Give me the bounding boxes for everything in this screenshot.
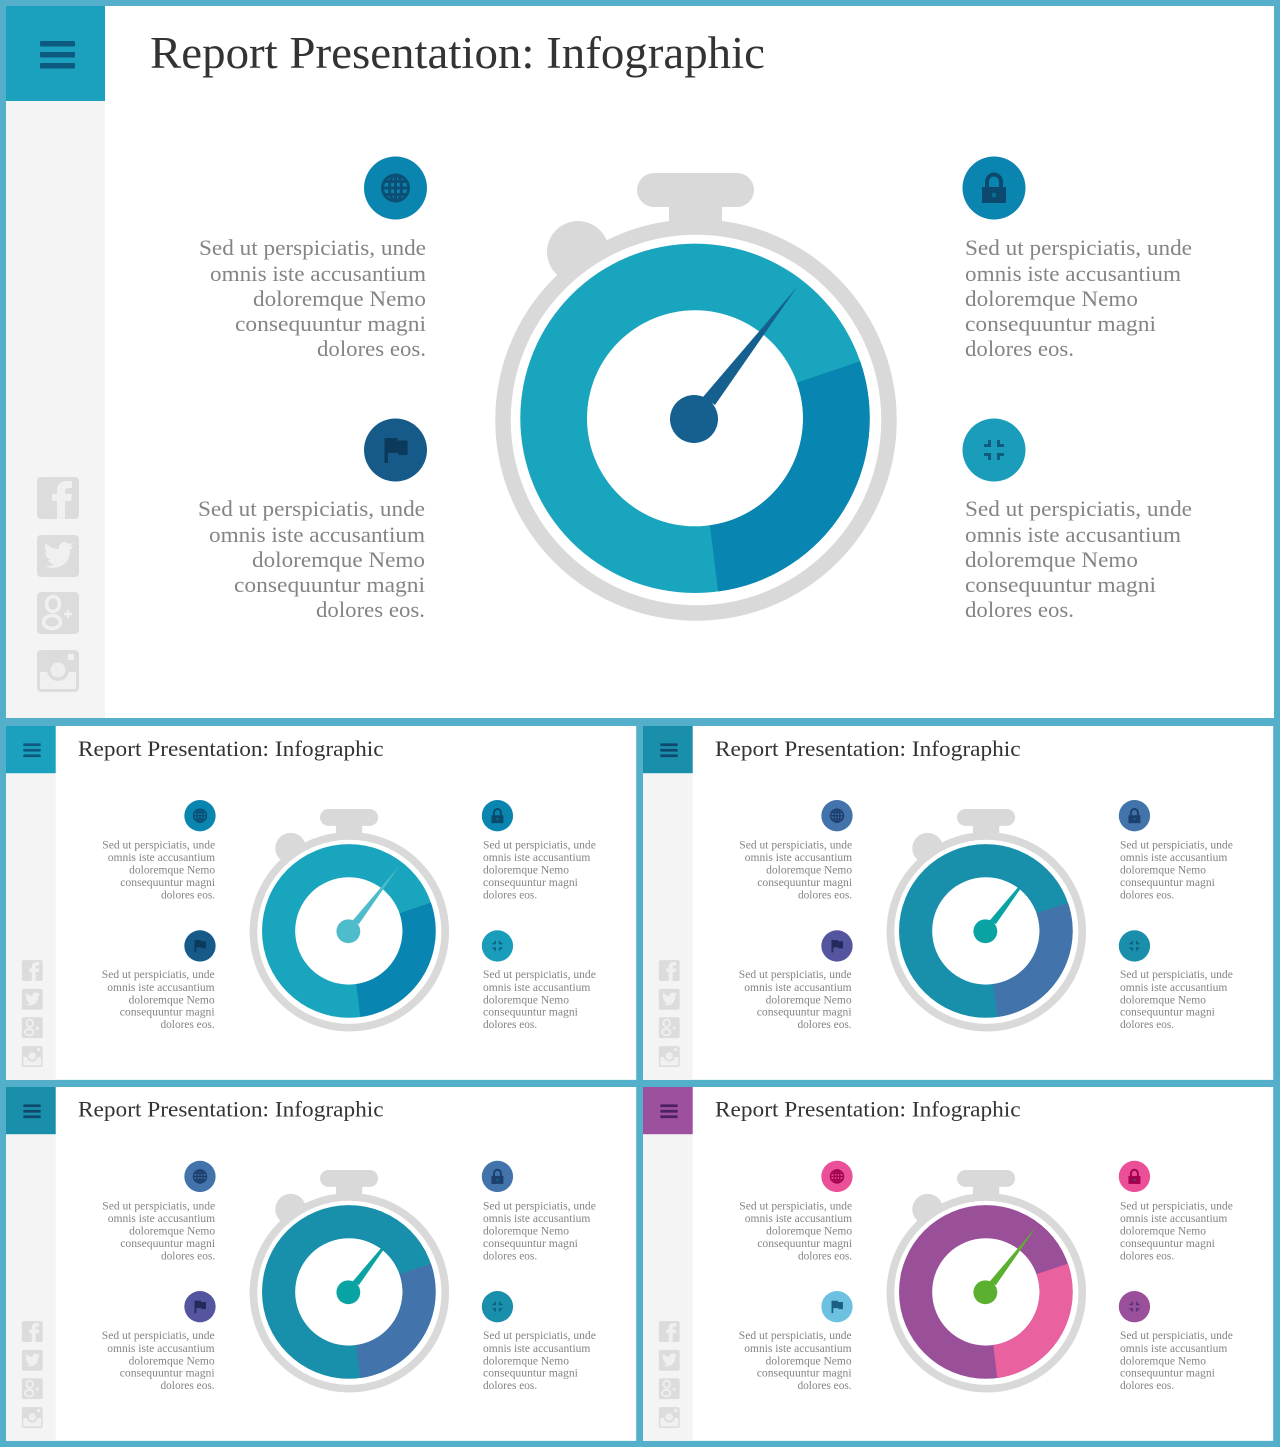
- text block: top left: consequuntur magni: [120, 877, 215, 889]
- text block: bottom left: omnis iste accusantium: [107, 1343, 215, 1355]
- text block: top right: [483, 1200, 596, 1262]
- icon: globe: [184, 1161, 216, 1192]
- text block: top right: [1120, 839, 1233, 901]
- text block: bottom left: omnis iste accusantium: [744, 1343, 852, 1355]
- text block: bottom right: dolores eos.: [483, 1380, 537, 1392]
- social icons column: [659, 1321, 680, 1428]
- title: Report Presentation: Infographic: [78, 736, 384, 761]
- text block: bottom right: omnis iste accusantium: [1120, 1343, 1228, 1355]
- title: Report Presentation: Infographic: [715, 736, 1021, 761]
- text block: bottom right: [965, 496, 1192, 622]
- panel: small slide, blue: [6, 726, 636, 1080]
- text block: bottom right: doloremque Nemo: [1120, 1355, 1206, 1367]
- text block: bottom right: [483, 1330, 596, 1392]
- text block: top right: dolores eos.: [1120, 889, 1174, 901]
- text block: bottom left: consequuntur magni: [234, 572, 425, 597]
- text block: top right: Sed ut perspiciatis, unde: [1120, 839, 1233, 851]
- text block: top right: doloremque Nemo: [1120, 1226, 1206, 1238]
- icon: globe: [184, 800, 216, 831]
- text block: bottom left: doloremque Nemo: [766, 994, 852, 1006]
- text block: top right: Sed ut perspiciatis, unde: [965, 235, 1192, 260]
- text block: bottom right: dolores eos.: [1120, 1019, 1174, 1031]
- text block: bottom left: omnis iste accusantium: [744, 982, 852, 994]
- text block: top left: [102, 839, 216, 901]
- text block: top right: Sed ut perspiciatis, unde: [483, 839, 596, 851]
- text block: bottom right: Sed ut perspiciatis, unde: [965, 496, 1192, 521]
- icon: flag: [184, 930, 216, 962]
- panel: main slide: [6, 6, 1274, 718]
- text block: bottom left: consequuntur magni: [120, 1007, 215, 1019]
- text block: top left: omnis iste accusantium: [108, 852, 215, 864]
- text block: bottom left: dolores eos.: [316, 597, 425, 622]
- text block: top right: Sed ut perspiciatis, unde: [1120, 1200, 1233, 1212]
- text block: bottom left: Sed ut perspiciatis, unde: [739, 1330, 852, 1342]
- text block: top left: Sed ut perspiciatis, unde: [102, 839, 215, 851]
- icon: compress arrows: [482, 1291, 513, 1322]
- text block: bottom left: Sed ut perspiciatis, unde: [102, 1330, 215, 1342]
- text block: top left: consequuntur magni: [120, 1238, 215, 1250]
- text block: top left: omnis iste accusantium: [108, 1213, 215, 1225]
- text block: top left: consequuntur magni: [757, 877, 852, 889]
- text block: top left: [739, 839, 853, 901]
- text block: top left: dolores eos.: [161, 889, 215, 901]
- icon: compress arrows: [962, 418, 1026, 482]
- text block: top right: [483, 839, 596, 901]
- text block: top right: omnis iste accusantium: [1120, 852, 1228, 864]
- text block: bottom left: doloremque Nemo: [129, 1355, 215, 1367]
- text block: bottom right: omnis iste accusantium: [965, 522, 1182, 547]
- text block: bottom left: Sed ut perspiciatis, unde: [198, 496, 425, 521]
- text block: top left: Sed ut perspiciatis, unde: [739, 839, 852, 851]
- text block: bottom left: [739, 969, 852, 1031]
- text block: bottom right: Sed ut perspiciatis, unde: [1120, 1330, 1233, 1342]
- icon: flag: [364, 418, 427, 482]
- text block: top right: consequuntur magni: [483, 1238, 578, 1250]
- text block: top left: [102, 1200, 216, 1262]
- title: Report Presentation: Infographic: [78, 1096, 384, 1121]
- menu header block: [643, 1087, 693, 1134]
- text block: top left: [739, 1200, 853, 1262]
- text block: bottom left: [198, 496, 426, 622]
- text block: top right: [1120, 1200, 1233, 1262]
- social icons column: [22, 1321, 43, 1428]
- text block: bottom left: dolores eos.: [797, 1019, 852, 1031]
- title: Report Presentation: Infographic: [150, 28, 765, 78]
- text block: top left: dolores eos.: [317, 336, 426, 361]
- social icons column: [37, 477, 79, 692]
- text block: bottom left: omnis iste accusantium: [209, 522, 426, 547]
- chart: stopwatch donut: [253, 809, 445, 1028]
- text block: top left: omnis iste accusantium: [745, 852, 852, 864]
- text block: top left: consequuntur magni: [757, 1238, 852, 1250]
- text block: top right: [965, 235, 1192, 361]
- text block: bottom right: doloremque Nemo: [1120, 994, 1206, 1006]
- text block: top right: consequuntur magni: [965, 311, 1156, 336]
- text block: bottom right: consequuntur magni: [483, 1007, 578, 1019]
- text block: bottom right: Sed ut perspiciatis, unde: [483, 969, 596, 981]
- icon: lock: [1119, 1161, 1150, 1192]
- text block: bottom right: dolores eos.: [1120, 1380, 1174, 1392]
- panel: small slide, purple and pink: [643, 1087, 1273, 1441]
- text block: bottom right: omnis iste accusantium: [483, 982, 591, 994]
- text block: top right: consequuntur magni: [1120, 1238, 1215, 1250]
- text block: top right: consequuntur magni: [483, 877, 578, 889]
- text block: bottom right: omnis iste accusantium: [483, 1343, 591, 1355]
- text block: top right: omnis iste accusantium: [965, 261, 1182, 286]
- text block: bottom right: consequuntur magni: [965, 572, 1156, 597]
- text block: top left: [199, 235, 427, 361]
- text block: bottom right: consequuntur magni: [483, 1368, 578, 1380]
- text block: bottom right: Sed ut perspiciatis, unde: [483, 1330, 596, 1342]
- text block: top left: Sed ut perspiciatis, unde: [102, 1200, 215, 1212]
- icon: compress arrows: [482, 930, 513, 962]
- text block: bottom left: consequuntur magni: [120, 1368, 215, 1380]
- icon: globe: [821, 1161, 853, 1192]
- menu header block: [6, 1087, 56, 1134]
- text block: bottom right: [1120, 1330, 1233, 1392]
- text block: top right: doloremque Nemo: [965, 286, 1138, 311]
- icon: flag: [821, 1291, 853, 1322]
- text block: top right: doloremque Nemo: [483, 1226, 569, 1238]
- text block: bottom left: omnis iste accusantium: [107, 982, 215, 994]
- icon: flag: [821, 930, 853, 962]
- text block: top left: dolores eos.: [798, 889, 852, 901]
- menu header block: [6, 726, 56, 773]
- icon: lock: [1119, 800, 1150, 831]
- text block: top left: doloremque Nemo: [129, 865, 216, 877]
- text block: top left: doloremque Nemo: [129, 1226, 216, 1238]
- text block: top left: Sed ut perspiciatis, unde: [199, 235, 426, 260]
- text block: bottom right: doloremque Nemo: [483, 1355, 569, 1367]
- text block: top left: consequuntur magni: [235, 311, 426, 336]
- text block: top right: dolores eos.: [483, 889, 537, 901]
- text block: top left: Sed ut perspiciatis, unde: [739, 1200, 852, 1212]
- text block: top right: Sed ut perspiciatis, unde: [483, 1200, 596, 1212]
- text block: bottom right: consequuntur magni: [1120, 1368, 1215, 1380]
- text block: bottom left: doloremque Nemo: [129, 994, 215, 1006]
- text block: bottom right: doloremque Nemo: [483, 994, 569, 1006]
- panel: small slide, steel blue top: [643, 726, 1273, 1080]
- text block: top right: doloremque Nemo: [483, 865, 569, 877]
- text block: bottom left: Sed ut perspiciatis, unde: [739, 969, 852, 981]
- text block: bottom right: omnis iste accusantium: [1120, 982, 1228, 994]
- icon: globe: [364, 156, 427, 220]
- icon: lock: [482, 1161, 513, 1192]
- text block: bottom right: dolores eos.: [483, 1019, 537, 1031]
- text block: bottom right: doloremque Nemo: [965, 547, 1138, 572]
- text block: bottom left: consequuntur magni: [757, 1007, 852, 1019]
- text block: bottom right: dolores eos.: [965, 597, 1074, 622]
- text block: bottom right: Sed ut perspiciatis, unde: [1120, 969, 1233, 981]
- text block: top right: dolores eos.: [483, 1250, 537, 1262]
- text block: top right: dolores eos.: [1120, 1250, 1174, 1262]
- text block: bottom right: [1120, 969, 1233, 1031]
- text block: top left: doloremque Nemo: [253, 286, 426, 311]
- text block: bottom right: consequuntur magni: [1120, 1007, 1215, 1019]
- social icons column: [22, 960, 43, 1067]
- chart: stopwatch donut: [503, 173, 889, 613]
- text block: bottom left: Sed ut perspiciatis, unde: [102, 969, 215, 981]
- icon: globe: [821, 800, 853, 831]
- menu header block: [6, 6, 105, 101]
- icon: flag: [184, 1291, 216, 1322]
- menu header block: [643, 726, 693, 773]
- text block: top left: doloremque Nemo: [766, 1226, 853, 1238]
- text block: bottom left: [102, 969, 215, 1031]
- text block: top right: omnis iste accusantium: [1120, 1213, 1228, 1225]
- panel: small slide, steel blue bottom: [6, 1087, 636, 1441]
- text block: top left: omnis iste accusantium: [210, 261, 427, 286]
- text block: bottom left: consequuntur magni: [757, 1368, 852, 1380]
- text block: top right: omnis iste accusantium: [483, 852, 591, 864]
- text block: top right: consequuntur magni: [1120, 877, 1215, 889]
- text block: bottom left: doloremque Nemo: [766, 1355, 852, 1367]
- icon: compress arrows: [1119, 1291, 1150, 1322]
- icon: lock: [962, 156, 1026, 220]
- social icons column: [659, 960, 680, 1067]
- chart: stopwatch donut: [253, 1170, 445, 1389]
- text block: top left: dolores eos.: [161, 1250, 215, 1262]
- text block: top left: dolores eos.: [798, 1250, 852, 1262]
- chart: stopwatch donut: [890, 1170, 1082, 1389]
- text block: bottom left: dolores eos.: [797, 1380, 852, 1392]
- text block: bottom left: [102, 1330, 215, 1392]
- chart: stopwatch donut: [890, 809, 1082, 1028]
- text block: bottom left: [739, 1330, 852, 1392]
- text block: bottom left: doloremque Nemo: [252, 547, 425, 572]
- text block: top right: dolores eos.: [965, 336, 1074, 361]
- text block: top right: omnis iste accusantium: [483, 1213, 591, 1225]
- title: Report Presentation: Infographic: [715, 1096, 1021, 1121]
- text block: top left: doloremque Nemo: [766, 865, 853, 877]
- text block: top right: doloremque Nemo: [1120, 865, 1206, 877]
- text block: bottom left: dolores eos.: [160, 1019, 215, 1031]
- text block: bottom right: [483, 969, 596, 1031]
- icon: lock: [482, 800, 513, 831]
- text block: bottom left: dolores eos.: [160, 1380, 215, 1392]
- icon: compress arrows: [1119, 930, 1150, 962]
- text block: top left: omnis iste accusantium: [745, 1213, 852, 1225]
